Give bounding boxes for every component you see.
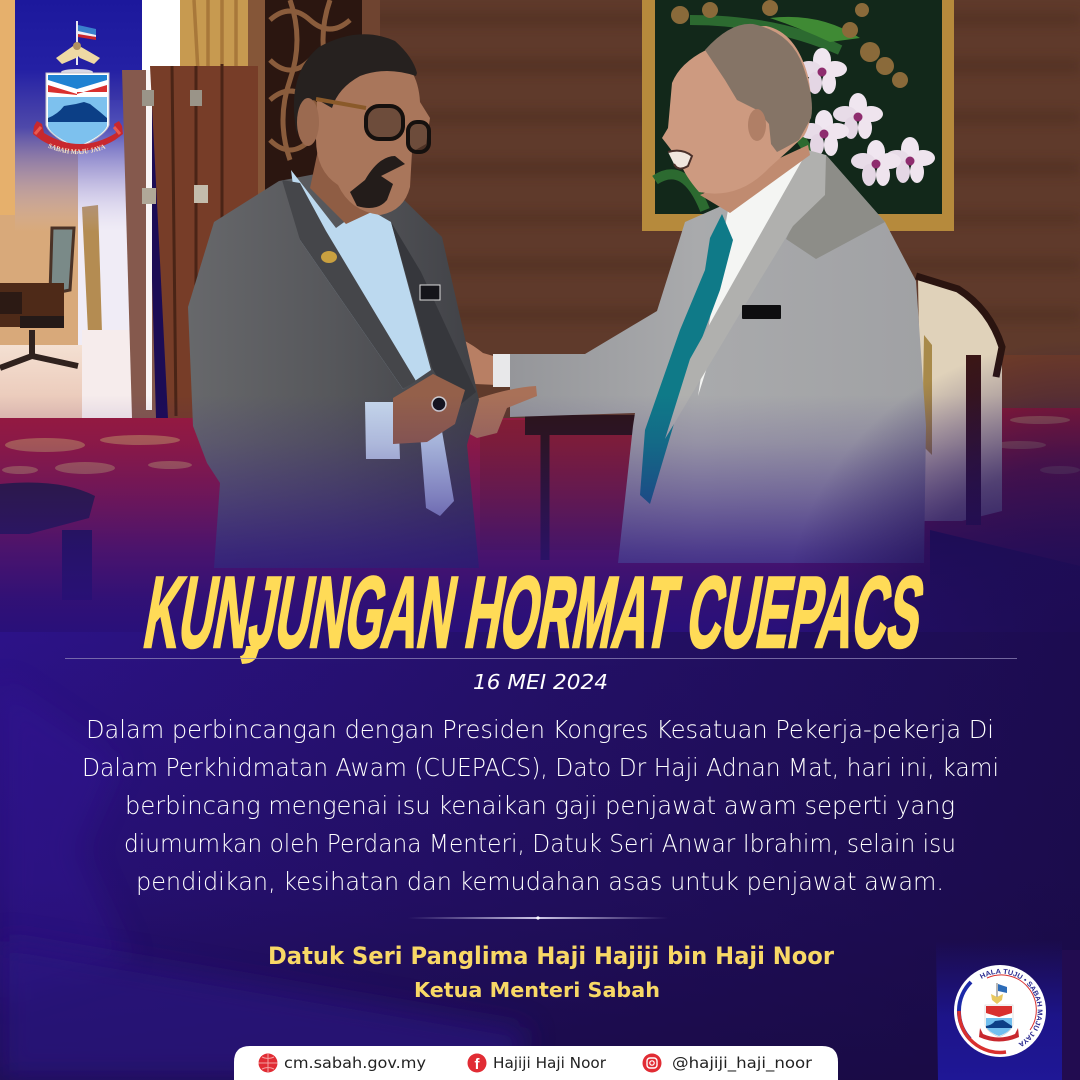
logo: Sabah coat of arms (33, 21, 123, 154)
divider line under title (65, 658, 1017, 659)
icon: website (258, 1054, 278, 1072)
icon: instagram (642, 1054, 662, 1072)
hair (705, 24, 812, 152)
centre table (525, 415, 637, 435)
logo: Hala Tuju Sabah Maju Jaya (954, 965, 1046, 1057)
back hand (443, 333, 497, 385)
carpet (0, 418, 1080, 638)
cuff (493, 354, 510, 387)
instagram text: @hajiji_haji_noor (672, 1054, 813, 1073)
body text: berbincang mengenai isu kenaikan gaji penjawat awam seperti yang (125, 791, 955, 820)
ear (297, 98, 319, 146)
footer contact bar (234, 1046, 838, 1080)
photo: ornate chair (916, 276, 1002, 525)
left side table (0, 482, 95, 534)
photo: man on the right (443, 24, 926, 563)
signatory name: Datuk Seri Panglima Haji Hajiji bin Haji Noor (268, 942, 834, 970)
curtain (180, 0, 248, 72)
ornament divider (408, 916, 668, 920)
front hand (452, 386, 537, 438)
icon: facebook (468, 1054, 486, 1073)
cuff (365, 402, 400, 459)
dark foreground right (930, 530, 1080, 626)
photo: meeting room background (0, 0, 1080, 638)
icon: facebook: f (474, 1056, 480, 1073)
wood wall (370, 0, 1080, 420)
left room (0, 0, 150, 430)
neck (700, 145, 810, 213)
title J descender (240, 646, 260, 664)
badge (420, 285, 440, 300)
lapel (282, 180, 416, 389)
lattice (265, 0, 365, 192)
beard (350, 156, 405, 208)
glasses (366, 106, 429, 152)
hair (294, 34, 417, 135)
folding screen (122, 70, 156, 418)
body text: pendidikan, kesihatan dan kemudahan asas untuk penjawat awam. (136, 867, 944, 896)
website text: cm.sabah.gov.my (284, 1054, 426, 1072)
logo: Hala Tuju Sabah Maju Jaya: HALA TUJU • SABAH MAJU JAYA (980, 968, 1043, 1046)
shirt (291, 170, 431, 389)
jacket (510, 155, 926, 563)
post (248, 0, 268, 195)
jacket (188, 172, 479, 568)
tie (640, 214, 733, 504)
logo: Sabah coat of arms: SABAH MAJU JAYA (48, 144, 106, 154)
lapel (665, 150, 826, 439)
signatory role: Ketua Menteri Sabah (414, 978, 660, 1002)
brooch (321, 251, 337, 263)
bottom panel (0, 632, 1080, 1080)
facebook text: Hajiji Haji Noor (493, 1054, 607, 1072)
body text (82, 715, 999, 896)
hand (393, 374, 465, 444)
ring (432, 397, 446, 411)
body text: Dalam Perkhidmatan Awam (CUEPACS), Dato Dr Haji Adnan Mat, hari ini, kami (82, 753, 999, 782)
smile (668, 151, 692, 169)
photo: man on the left (188, 34, 479, 568)
head (662, 26, 811, 194)
gradient overlay (0, 340, 1080, 635)
neck (310, 150, 376, 224)
shirt (698, 150, 812, 396)
body text: Dalam perbincangan dengan Presiden Kongres Kesatuan Pekerja-pekerja Di (86, 715, 994, 744)
name badge (742, 305, 781, 319)
photo: painting of orchids (642, 0, 954, 231)
date: 16 MEI 2024 (473, 670, 608, 694)
body text: diumumkan oleh Perdana Menteri, Datuk Seri Anwar Ibrahim, selain isu (124, 829, 956, 858)
head (316, 51, 430, 215)
office chair (50, 228, 74, 294)
ear (748, 109, 766, 141)
